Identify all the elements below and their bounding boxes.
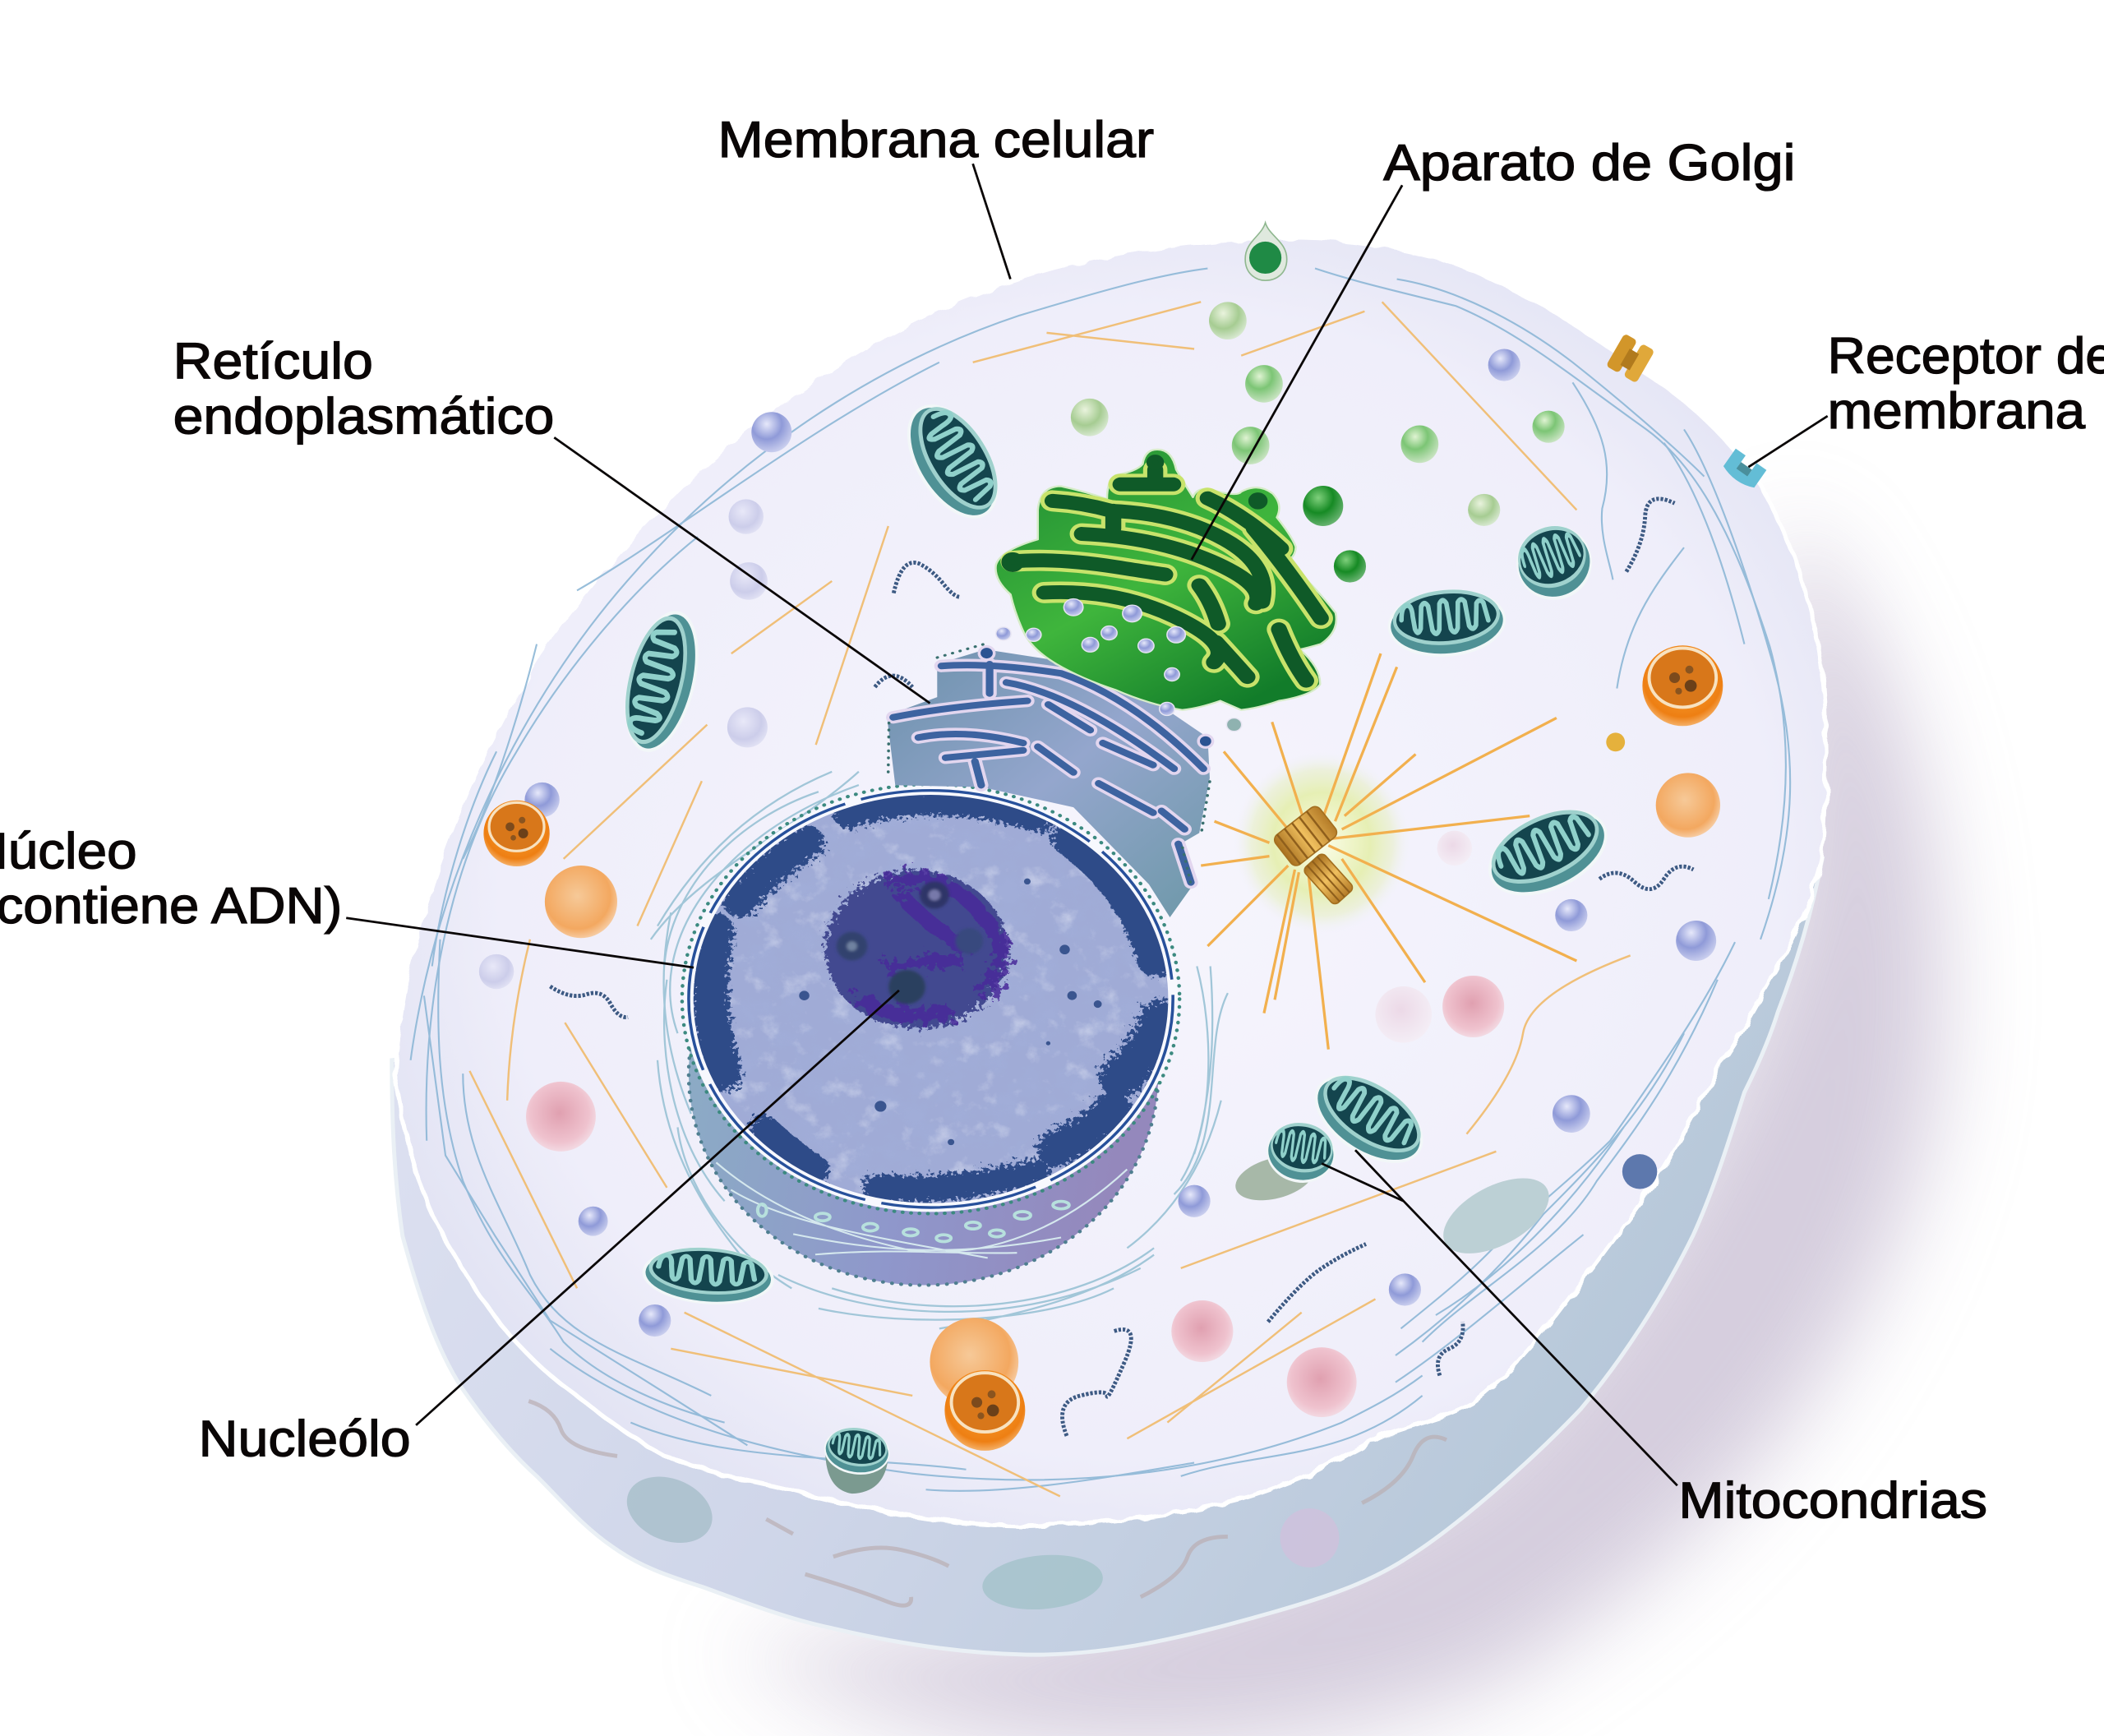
Golgi apparatus <box>995 450 1336 732</box>
label: Retículo endoplasmático <box>173 333 554 445</box>
cytoskeleton filaments near membrane <box>411 269 1790 1491</box>
endoplasmic reticulum <box>887 644 1213 917</box>
label: Membrana celular: Membrana celular <box>717 112 1154 169</box>
mitochondrion 5 <box>1477 795 1619 911</box>
vesicles: pink <box>526 732 1625 1417</box>
nucleoplasm <box>690 791 1172 1207</box>
membrane receptor: gold <box>1606 334 1654 383</box>
label: Retículo endoplasmático: endoplasmático <box>173 388 554 445</box>
lysosomes: pale orange <box>545 773 1720 1406</box>
nucleus side wall <box>689 863 1158 1286</box>
lysosomes: orange cups <box>483 645 1723 1451</box>
rim highlight on the side wall <box>394 859 1822 1526</box>
Golgi vesicles <box>996 599 1242 732</box>
centriole 2 <box>1303 852 1354 906</box>
nuclear envelope <box>682 784 1179 1213</box>
mitochondrion 8 <box>642 1244 774 1307</box>
centrosome rays <box>1201 653 1576 1050</box>
label: Retículo endoplasmático: Retículo <box>173 333 373 390</box>
vesicles: blue <box>524 349 1716 1337</box>
nucleus <box>682 784 1179 1286</box>
label: Núcleo (contiene ADN) <box>0 823 342 935</box>
organelles on side wall <box>528 1401 1446 1614</box>
ER cisternae <box>893 664 1203 883</box>
mitochondrion 9 with tail <box>822 1424 892 1494</box>
Golgi cisternae lumen <box>1008 457 1321 681</box>
vesicles: pale lavender <box>479 499 768 989</box>
chromatin patches <box>710 802 1162 1189</box>
mitochondrion 7 with tail <box>1230 1119 1339 1208</box>
pale mitochondrion <box>1432 1163 1561 1269</box>
ER ribosome dots <box>888 644 1210 884</box>
label: Receptor de membrana: Receptor de <box>1828 328 2104 385</box>
membrane secretory vesicle <box>1245 223 1287 280</box>
centrosome <box>1201 653 1576 1050</box>
RNA strands <box>550 499 1693 1436</box>
mitochondria <box>614 391 1619 1494</box>
nucleoplasm mottling <box>694 796 1167 1202</box>
microtubules <box>469 302 1631 1496</box>
Golgi body <box>995 450 1336 710</box>
nucleolus <box>825 870 1007 1028</box>
membrane receptor: blue <box>1721 449 1766 491</box>
centrosome glow <box>1233 751 1410 934</box>
label: Nucleólo: Nucleólo <box>199 1410 411 1467</box>
centriole 1 <box>1271 804 1340 868</box>
label: Aparato de Golgi: Aparato de Golgi <box>1383 135 1795 192</box>
mitochondrion 3 <box>1387 586 1507 660</box>
ER buds <box>979 647 1213 747</box>
Golgi cisternae outline <box>1013 469 1321 681</box>
cell body: top face with membrane <box>394 238 1826 1526</box>
cast shadow of the cell <box>725 510 1941 1736</box>
label: Mitocondrias: Mitocondrias <box>1678 1473 1987 1530</box>
mitochondrion 4 <box>1507 517 1601 608</box>
mitochondrion 2 <box>614 606 709 758</box>
mitochondrion 6 <box>1301 1060 1437 1179</box>
ER body <box>887 649 1210 917</box>
label: Receptor de membrana <box>1828 328 2104 440</box>
cell body: side wall <box>392 859 1822 1655</box>
vesicles: green <box>1071 302 1565 583</box>
mitochondrion 1 <box>891 391 1014 532</box>
perinuclear filaments <box>651 772 1228 1328</box>
leader lines <box>346 164 1828 1485</box>
label: Receptor de membrana: membrana <box>1828 383 2086 440</box>
